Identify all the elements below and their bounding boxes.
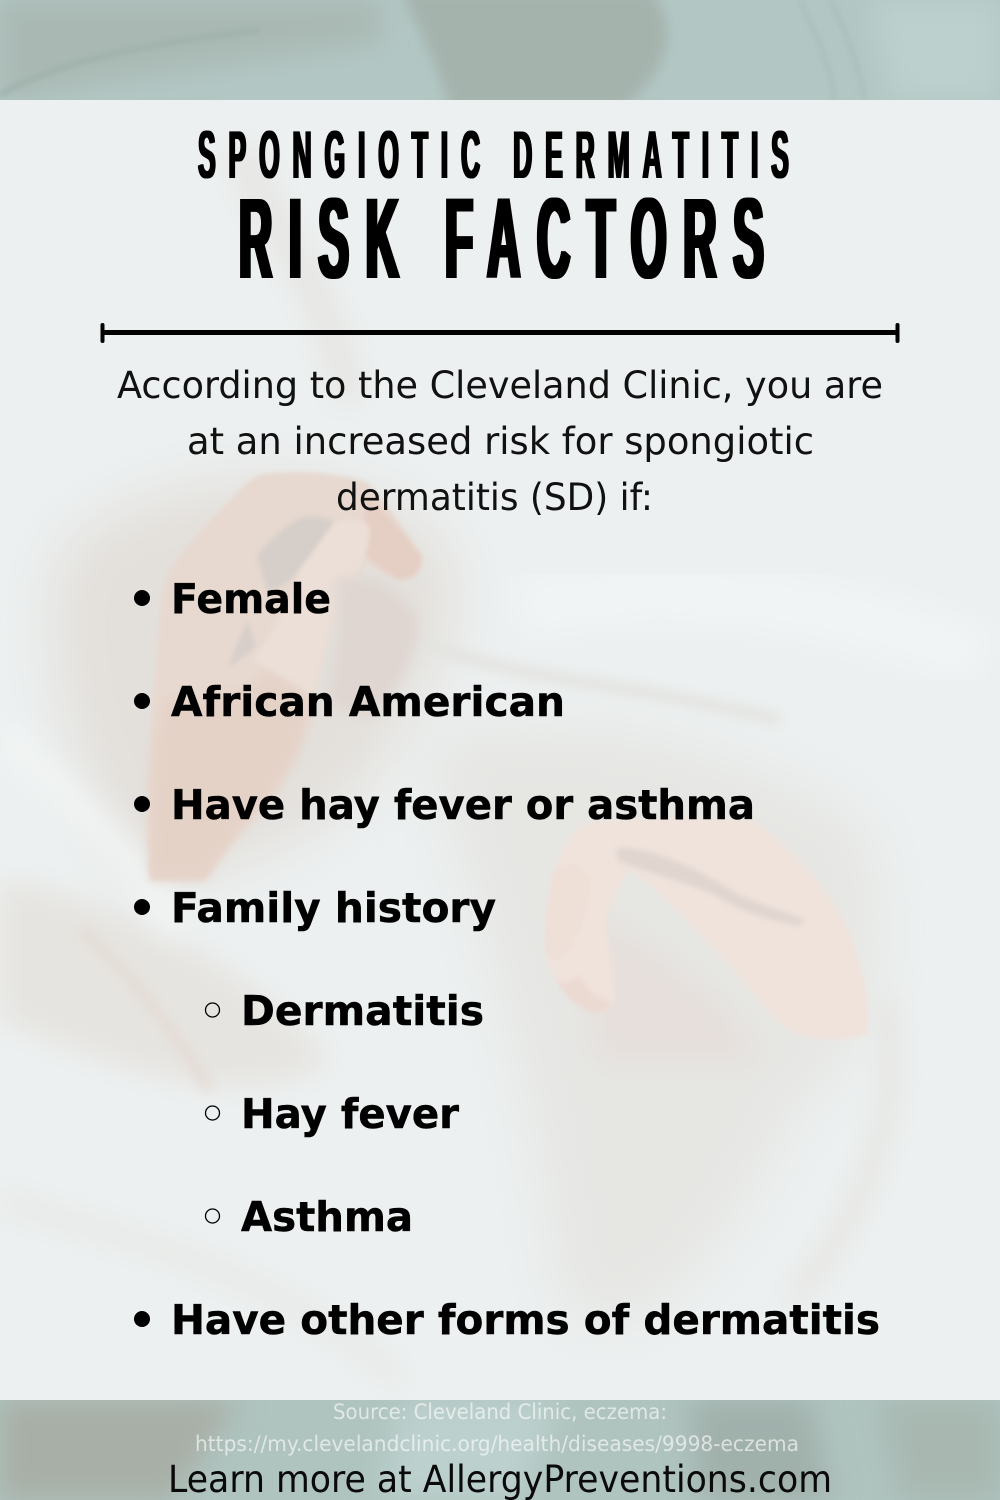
footer call to action: Learn more at AllergyPreventions.com — [168, 1458, 832, 1500]
background: bottom marble strip — [0, 1400, 1000, 1500]
marble swirls — [0, 161, 898, 1304]
panel: translucent background with hands — [0, 161, 898, 1304]
intro paragraph: dermatitis (SD) if: — [336, 476, 653, 519]
divider rule — [100, 323, 900, 343]
hand: upper left — [149, 472, 422, 880]
item: family history: Family history — [171, 884, 496, 932]
title: risk factors: RISK FACTORS — [239, 174, 764, 303]
source citation: https://my.clevelandclinic.org/health/diseases/9998-eczema — [195, 1432, 799, 1456]
sub-item: asthma: Asthma — [241, 1193, 413, 1241]
intro paragraph: According to the Cleveland Clinic, you are — [117, 364, 883, 407]
hand: lower right — [545, 820, 868, 1038]
intro paragraph — [117, 364, 883, 519]
item: african american: African American — [171, 678, 565, 726]
source citation — [195, 1400, 799, 1456]
title: spongiotic dermatitis: SPONGIOTIC DERMATITIS — [198, 116, 789, 192]
item: other forms of dermatitis: Have other forms of dermatitis — [171, 1296, 880, 1344]
risk factor list — [134, 575, 880, 1344]
item: hay fever or asthma: Have hay fever or asthma — [171, 781, 755, 829]
item: female: Female — [171, 575, 331, 623]
sub-item: dermatitis: Dermatitis — [241, 987, 484, 1035]
sub-item: hay fever: Hay fever — [241, 1090, 460, 1138]
background: top marble strip — [0, 0, 1000, 110]
source citation: Source: Cleveland Clinic, eczema: — [333, 1400, 667, 1424]
intro paragraph: at an increased risk for spongiotic — [187, 420, 814, 463]
